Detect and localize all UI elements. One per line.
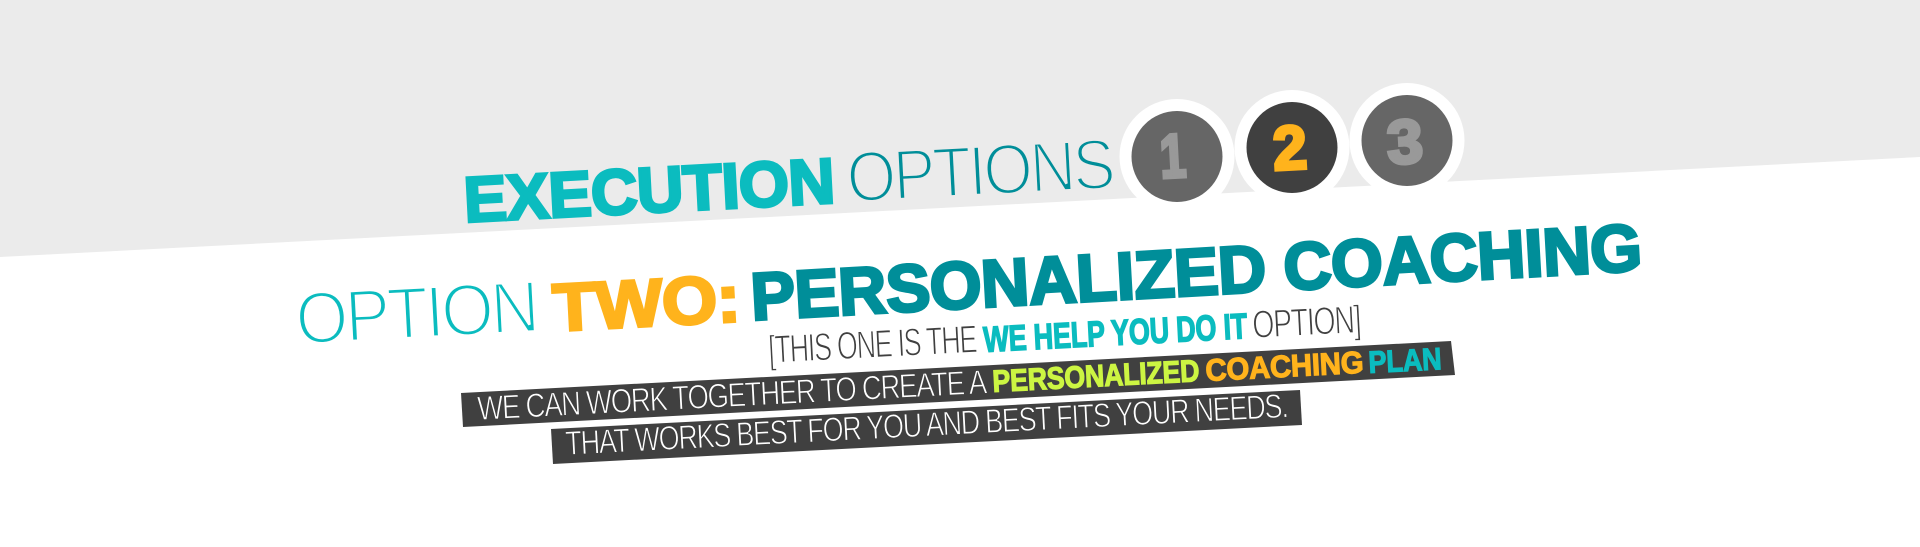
description bar 2 (551, 387, 1302, 464)
subtitle: we help you do it option (767, 298, 1361, 372)
grey slanted header band (0, 0, 1920, 257)
step badge 2 (active): 2 (1271, 113, 1309, 184)
title: option two personalized coaching: OPTION (294, 266, 539, 360)
description bar 1 (461, 341, 1455, 428)
heading: execution options: EXECUTION (462, 145, 836, 236)
subtitle: we help you do it option: [THIS ONE IS THE (767, 318, 978, 372)
title: option two personalized coaching: TWO: (551, 261, 742, 346)
description bar 1: PERSONALIZED (992, 353, 1200, 399)
step badge 3 (1350, 83, 1464, 198)
subtitle: we help you do it option: OPTION] (1251, 298, 1361, 347)
description bar 1: PLAN (1368, 341, 1442, 380)
subtitle: we help you do it option: WE HELP YOU DO IT (982, 305, 1248, 360)
description bar 1: WE CAN WORK TOGETHER TO CREATE A (476, 363, 988, 428)
step badge 3: 3 (1385, 107, 1425, 178)
description bar 2: THAT WORKS BEST FOR YOU AND BEST FITS YOUR NEEDS. (564, 387, 1288, 463)
title: option two personalized coaching: PERSONALIZED COACHING (749, 210, 1643, 335)
description bar 1: COACHING (1205, 345, 1364, 388)
heading: execution options: OPTIONS (845, 125, 1115, 218)
step badge 1: 1 (1158, 122, 1188, 192)
heading: execution options (462, 125, 1115, 236)
title: option two personalized coaching (294, 210, 1643, 360)
step badge 1 (1120, 99, 1234, 214)
step badge 2 (active) (1234, 90, 1350, 205)
